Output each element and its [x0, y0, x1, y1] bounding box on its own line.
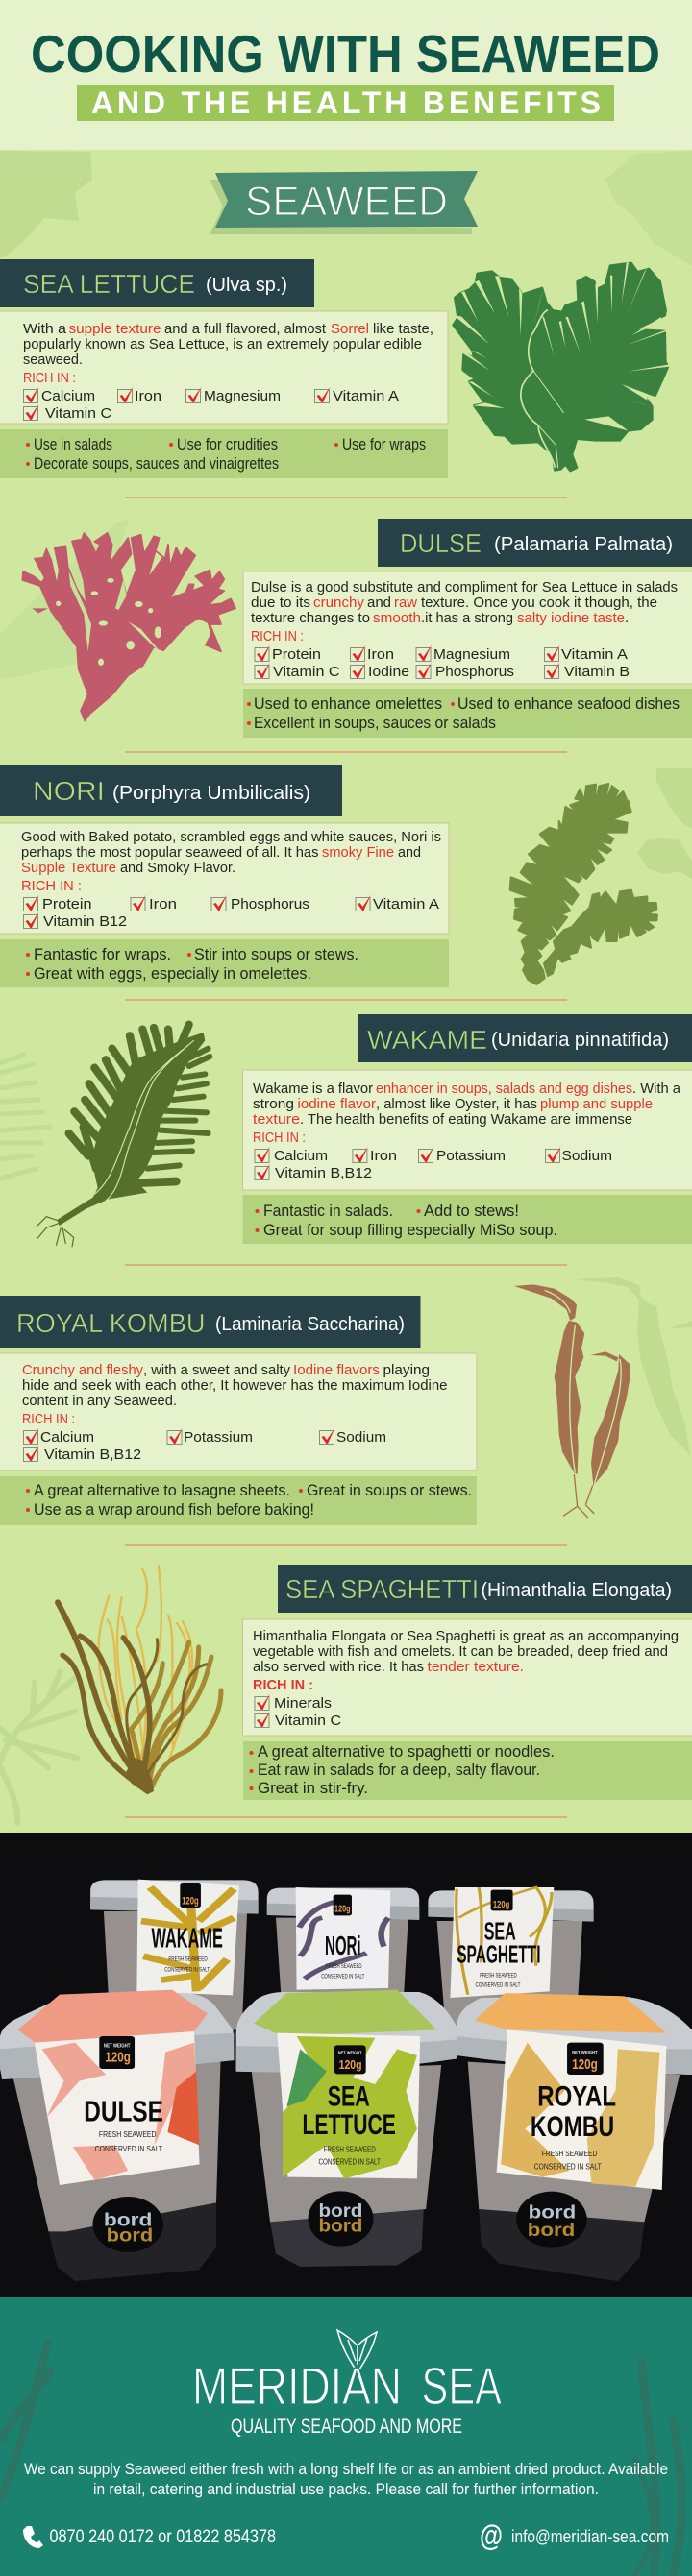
heading: nori	[0, 765, 342, 816]
uses panel: sea spaghetti: Great in stir-fry.	[258, 1779, 368, 1797]
description panel: wakame: . With a	[632, 1081, 681, 1097]
tub: wakame: FRESH SEAWEED	[168, 1956, 208, 1962]
description panel: royal kombu	[0, 1353, 477, 1470]
footer seaweed decorations	[0, 2344, 681, 2576]
heading: nori: (Porphyra Umbilicalis)	[112, 783, 310, 804]
footer	[0, 2297, 692, 2576]
tub: wakame: CONSERVED IN SALT	[164, 1966, 210, 1973]
description panel: sea lettuce: seaweed.	[23, 352, 83, 368]
heading: nori: NORI	[33, 776, 105, 806]
tub: royal kombu: CONSERVED IN SALT	[534, 2163, 602, 2172]
description panel: dulse: salty iodine taste	[517, 610, 625, 626]
description panel: royal kombu: Crunchy and fleshy	[22, 1362, 143, 1378]
tub: sea spaghetti: FRESH SEAWEED	[480, 1972, 517, 1979]
uses panel: sea spaghetti	[243, 1741, 692, 1800]
description panel: nori: Protein	[42, 896, 92, 912]
logo: meridian sea: QUALITY SEAFOOD AND MORE	[231, 2416, 462, 2438]
heading: sea lettuce: (Ulva sp.)	[206, 275, 287, 296]
icon: nori plant	[510, 784, 657, 984]
tub: sea spaghetti: SPAGHETTI	[457, 1940, 540, 1968]
uses panel: dulse: Excellent in soups, sauces or salads	[254, 714, 496, 732]
tub: sea spaghetti	[428, 1887, 594, 2029]
description panel: wakame: Calcium	[274, 1148, 328, 1164]
heading: sea spaghetti: SEA SPAGHETTI	[285, 1574, 479, 1604]
section: wakame	[37, 1014, 692, 1247]
tub: royal kombu: bord	[529, 2201, 576, 2222]
description panel: nori: smoky Fine	[322, 844, 394, 861]
description panel: dulse: Magnesium	[433, 646, 510, 663]
tub: dulse: FRESH SEAWEED	[99, 2130, 157, 2139]
description panel: dulse: Vitamin C	[273, 664, 340, 680]
uses panel: sea lettuce: Decorate soups, sauces and vinaigrettes	[34, 454, 279, 473]
tub: sea lettuce: bord	[319, 2215, 362, 2235]
section: sea lettuce	[0, 259, 670, 478]
description panel: sea spaghetti: tender texture.	[427, 1659, 524, 1675]
tub: dulse: DULSE	[84, 2095, 163, 2127]
description panel: royal kombu: Sodium	[336, 1429, 386, 1446]
section: sea spaghetti	[58, 1565, 692, 1800]
header	[0, 0, 692, 150]
description panel: dulse: .it has a strong	[421, 610, 513, 626]
uses panel: wakame: Add to stews!	[424, 1202, 519, 1220]
description panel: nori: Vitamin A	[373, 896, 439, 912]
description panel: sea spaghetti: Vitamin C	[275, 1713, 341, 1729]
divider	[125, 751, 567, 753]
description panel: dulse: Vitamin A	[561, 646, 628, 663]
subtitle band: AND THE HEALTH BENEFITS	[91, 85, 601, 120]
description panel: sea lettuce	[0, 311, 448, 424]
description panel: royal kombu: content in any Seaweed.	[22, 1393, 177, 1409]
icon: phone	[23, 2526, 43, 2548]
description panel: wakame: iodine flavor	[298, 1096, 376, 1112]
description panel: royal kombu: RICH IN :	[22, 1411, 75, 1427]
description panel: dulse: Iron	[367, 646, 394, 663]
description panel: wakame: Potassium	[436, 1148, 506, 1164]
tub: sea lettuce: SEA	[328, 2081, 370, 2112]
description panel: wakame: plump and supple	[540, 1096, 653, 1112]
description panel: wakame: Wakame is a flavor	[253, 1081, 373, 1097]
description panel: sea lettuce: and a full flavored, almost	[164, 321, 327, 337]
tub: royal kombu: KOMBU	[531, 2110, 614, 2143]
uses panel: nori: Fantastic for wraps.	[34, 945, 171, 963]
tub: nori: CONSERVED IN SALT	[321, 1973, 364, 1980]
description panel: nori: Good with Baked potato, scrambled eggs and white sauces, Nori is	[21, 829, 441, 845]
uses panel: royal kombu: A great alternative to lasagne sheets.	[34, 1481, 290, 1499]
heading: royal kombu	[0, 1296, 421, 1348]
description panel: wakame: Vitamin B,B12	[275, 1165, 372, 1181]
description panel: dulse: raw	[394, 595, 417, 611]
heading: dulse: (Palamaria Palmata)	[494, 534, 673, 555]
uses panel: sea lettuce	[0, 429, 448, 478]
icon: fish tail	[337, 2330, 377, 2372]
icon: sea lettuce plant	[454, 262, 670, 471]
banner: seaweed	[210, 171, 478, 234]
description panel: nori: Supple Texture	[21, 860, 116, 876]
description panel: wakame: enhancer in soups, salads and egg dishes	[376, 1081, 632, 1097]
tub: sea lettuce: CONSERVED IN SALT	[319, 2158, 381, 2167]
description panel: nori: and	[398, 844, 421, 861]
description panel: dulse: Protein	[272, 646, 321, 663]
heading: royal kombu: ROYAL KOMBU	[16, 1308, 206, 1338]
email contact: @	[480, 2518, 503, 2552]
description panel: royal kombu: , with a sweet and salty	[143, 1362, 290, 1378]
description panel: nori: RICH IN :	[21, 878, 82, 894]
title: COOKING WITH SEAWEED	[31, 24, 660, 84]
uses panel: sea lettuce: Use for crudities	[177, 435, 278, 453]
description panel: dulse: due to its	[251, 595, 310, 611]
description panel: dulse	[243, 571, 692, 684]
description panel: wakame: , almost like Oyster, it has	[376, 1096, 537, 1112]
tub: royal kombu: 120g	[572, 2056, 598, 2072]
email contact	[480, 2518, 669, 2552]
description panel: royal kombu: Calcium	[40, 1429, 94, 1446]
description panel: dulse: Phosphorus	[435, 664, 514, 680]
contact paragraph	[24, 2461, 668, 2498]
uses panel: nori	[0, 939, 449, 987]
description panel: nori: Iron	[149, 896, 177, 912]
tub: nori: 120g	[334, 1904, 351, 1914]
tub: sea lettuce: NET WEIGHT	[338, 2051, 362, 2055]
divider	[125, 1817, 567, 1818]
description panel: wakame: RICH IN :	[253, 1130, 306, 1146]
description panel: nori	[0, 823, 449, 934]
uses panel: wakame	[242, 1195, 692, 1244]
tub: royal kombu: ROYAL	[537, 2079, 616, 2112]
description panel: dulse: texture. Once you cook it though, the	[421, 595, 657, 611]
description panel: dulse: Vitamin B	[564, 664, 630, 680]
tub: royal kombu: bord	[528, 2220, 575, 2240]
description panel: dulse: smooth	[373, 610, 421, 626]
divider	[125, 999, 567, 1001]
description panel: dulse: .	[625, 610, 629, 626]
description panel: sea lettuce: Sorrel	[331, 321, 369, 337]
email contact: info@meridian-sea.com	[511, 2527, 669, 2546]
tub: dulse: bord	[107, 2224, 153, 2245]
logo: meridian sea: SEA	[421, 2356, 502, 2416]
uses panel: dulse	[243, 689, 692, 738]
heading: dulse	[378, 519, 692, 567]
description panel: sea lettuce: popularly known as Sea Lettuce, is an extremely popular edible	[23, 336, 422, 352]
icon: dulse plant	[22, 533, 235, 721]
icon: royal kombu plant	[514, 1284, 630, 1518]
uses panel: sea lettuce: Use for wraps	[342, 435, 426, 453]
divider	[125, 1544, 567, 1546]
description panel: sea lettuce: Calcium	[41, 388, 95, 404]
uses panel: sea spaghetti: Eat raw in salads for a deep, salty flavour.	[258, 1761, 540, 1779]
background leaf decorations	[0, 151, 692, 1823]
section: dulse	[22, 519, 692, 738]
description panel: sea lettuce: Vitamin A	[333, 388, 399, 404]
phone contact: 0870 240 0172 or 01822 854378	[50, 2527, 276, 2547]
uses panel: sea lettuce: Use in salads	[34, 435, 112, 453]
heading: wakame: WAKAME	[367, 1025, 487, 1055]
uses panel: wakame: Great for soup filling especially MiSo soup.	[263, 1221, 557, 1239]
description panel: royal kombu: hide and seek with each other, It however has the maximum Iodine	[22, 1377, 448, 1394]
tub: dulse: CONSERVED IN SALT	[95, 2145, 162, 2153]
description panel: dulse: texture changes to	[251, 610, 370, 626]
section: nori	[0, 765, 657, 987]
description panel: wakame: texture	[253, 1111, 300, 1128]
uses panel: nori: Great with eggs, especially in omelettes.	[34, 964, 311, 983]
description panel: sea lettuce: With a	[23, 321, 67, 337]
heading: sea spaghetti	[278, 1565, 692, 1613]
tub: sea lettuce: 120g	[339, 2057, 362, 2072]
tub: nori	[267, 1887, 419, 2017]
heading: sea lettuce: SEA LETTUCE	[23, 269, 195, 299]
tub: nori: NORi	[325, 1931, 361, 1961]
tub: wakame: 120g	[182, 1895, 199, 1907]
heading: wakame: (Unidaria pinnatifida)	[491, 1030, 669, 1051]
description panel: sea spaghetti: Minerals	[274, 1695, 332, 1712]
tub: wakame	[90, 1880, 259, 2029]
heading: sea spaghetti: (Himanthalia Elongata)	[481, 1580, 672, 1601]
logo: meridian sea: MERIDIAN	[192, 2356, 402, 2416]
description panel: sea spaghetti	[242, 1619, 692, 1736]
description panel: nori: Phosphorus	[231, 896, 309, 912]
tub: sea spaghetti: 120g	[493, 1899, 509, 1909]
description panel: sea lettuce: RICH IN :	[23, 370, 76, 386]
description panel: sea lettuce: like taste,	[373, 321, 433, 337]
tub: sea spaghetti: CONSERVED IN SALT	[476, 1981, 520, 1988]
description panel: dulse: RICH IN :	[251, 628, 304, 644]
tub: sea lettuce: LETTUCE	[303, 2109, 396, 2141]
description panel: sea spaghetti: vegetable with fish and omelets. It can be breaded, deep fried and	[253, 1643, 668, 1660]
tub: royal kombu: NET WEIGHT	[572, 2051, 598, 2055]
description panel: wakame	[242, 1070, 692, 1190]
uses panel: royal kombu: Use as a wrap around fish before baking!	[34, 1500, 314, 1519]
section: royal kombu	[0, 1284, 630, 1525]
description panel: dulse: Dulse is a good substitute and compliment for Sea Lettuce in salads	[251, 579, 678, 595]
uses panel: dulse: Used to enhance omelettes	[254, 694, 442, 713]
tub: dulse: NET WEIGHT	[104, 2044, 131, 2049]
description panel: dulse: and	[367, 595, 391, 611]
description panel: dulse: Iodine	[368, 664, 409, 680]
description panel: nori: perhaps the most popular seaweed of all. It has	[21, 844, 319, 861]
description panel: sea spaghetti: Himanthalia Elongata or Sea Spaghetti is great as an accompanying	[253, 1628, 679, 1644]
tub: nori: FRESH SEAWEED	[326, 1962, 362, 1970]
description panel: wakame: . The health benefits of eating Wakame are immense	[300, 1111, 632, 1128]
tub: dulse: 120g	[105, 2049, 131, 2065]
description panel: sea lettuce: Vitamin C	[45, 405, 111, 422]
heading: royal kombu: (Laminaria Saccharina)	[215, 1314, 405, 1335]
tub: sea lettuce	[236, 1990, 457, 2267]
photo: seaweed product tubs	[0, 1833, 692, 2297]
description panel: nori: Vitamin B12	[43, 913, 127, 930]
description panel: nori: and Smoky Flavor.	[120, 860, 235, 876]
uses panel: nori: Stir into soups or stews.	[194, 945, 358, 963]
description panel: sea spaghetti: also served with rice. It has	[253, 1659, 424, 1675]
description panel: sea lettuce: supple texture	[69, 321, 161, 337]
heading: sea lettuce	[0, 259, 314, 307]
banner: seaweed: SEAWEED	[245, 179, 448, 225]
description panel: wakame: strong	[253, 1096, 294, 1112]
description panel: sea spaghetti: RICH IN :	[253, 1677, 313, 1693]
uses panel: sea spaghetti: A great alternative to spaghetti or noodles.	[258, 1742, 555, 1761]
heading: dulse: DULSE	[400, 528, 482, 558]
description panel: wakame: Sodium	[561, 1148, 612, 1164]
page background	[0, 150, 692, 1833]
tub: sea spaghetti: SEA	[484, 1917, 516, 1945]
tub: royal kombu: FRESH SEAWEED	[542, 2150, 598, 2158]
uses panel: royal kombu: Great in soups or stews.	[307, 1481, 472, 1499]
description panel: royal kombu: Potassium	[184, 1429, 253, 1446]
description panel: sea lettuce: Magnesium	[204, 388, 281, 404]
tub: wakame: WAKAME	[151, 1924, 223, 1954]
uses panel: royal kombu	[0, 1476, 477, 1525]
divider	[125, 1264, 567, 1266]
description panel: royal kombu: Iodine flavors	[293, 1362, 380, 1378]
tub: dulse: bord	[104, 2209, 152, 2229]
tub: royal kombu	[457, 1993, 692, 2281]
description panel: royal kombu: playing	[383, 1362, 430, 1378]
heading: wakame	[358, 1014, 692, 1062]
logo: meridian sea	[192, 2330, 502, 2438]
description panel: royal kombu: Vitamin B,B12	[44, 1446, 141, 1463]
icon: sea spaghetti plant	[58, 1566, 221, 1794]
description panel: sea lettuce: Iron	[135, 388, 161, 404]
uses panel: dulse: Used to enhance seafood dishes	[457, 694, 680, 713]
icon: wakame plant	[37, 1025, 210, 1247]
description panel: dulse: crunchy	[313, 595, 364, 611]
uses panel: wakame: Fantastic in salads.	[263, 1202, 393, 1220]
description panel: wakame: Iron	[370, 1148, 397, 1164]
tub: sea lettuce: bord	[319, 2200, 362, 2221]
tub: dulse	[0, 1990, 234, 2281]
contact paragraph: in retail, catering and industrial use packs. Please call for further information.	[93, 2481, 599, 2498]
tub: sea lettuce: FRESH SEAWEED	[324, 2146, 376, 2154]
